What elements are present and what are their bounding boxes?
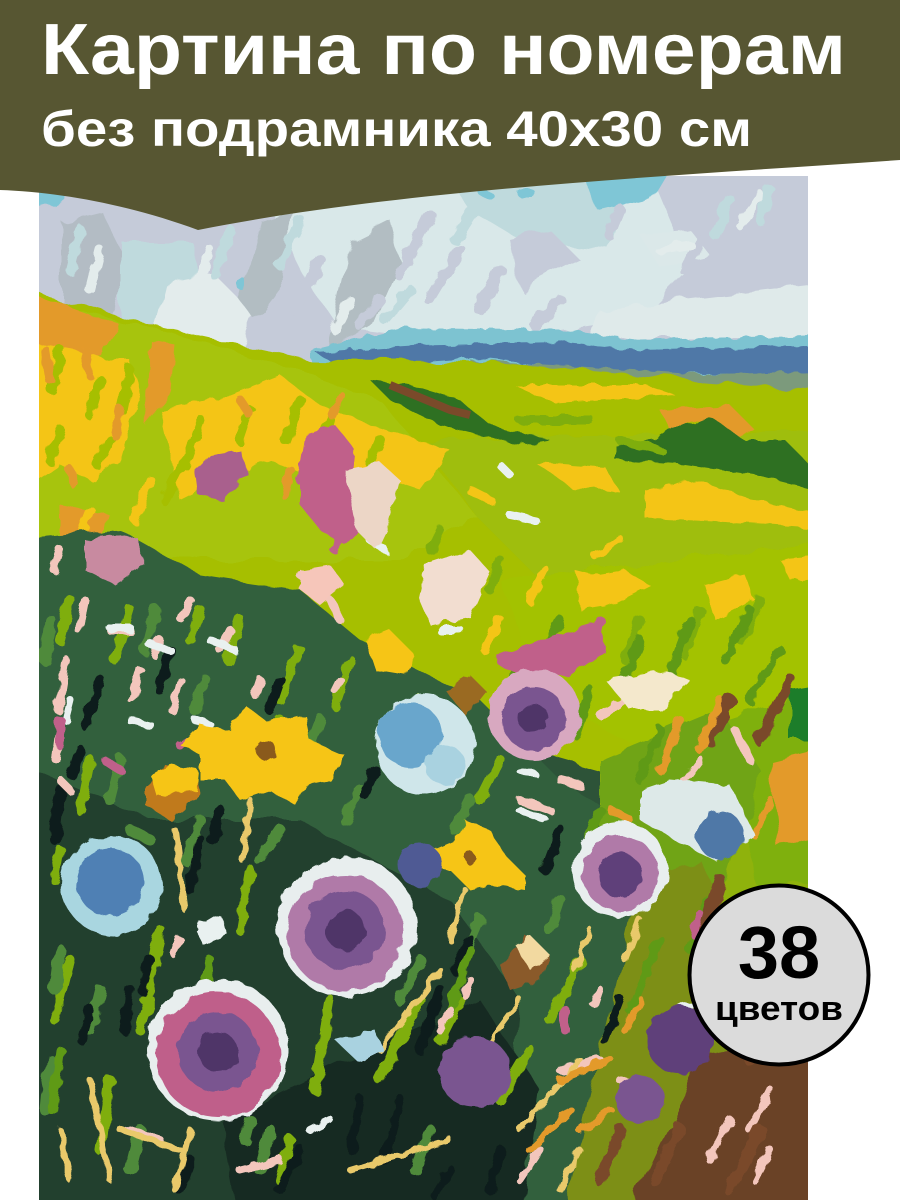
flower: purple allium centre: [277, 857, 417, 997]
brush strokes: [45, 440, 790, 1195]
flower buds: [145, 630, 550, 1062]
meadow base: [39, 292, 808, 772]
painting: meadow landscape: [39, 176, 808, 1200]
badge: colour count: [690, 886, 868, 1064]
flower: blue left: [62, 835, 162, 935]
field strokes: [45, 350, 760, 670]
sky: [39, 176, 808, 362]
flower: purple allium upper: [489, 669, 581, 761]
yellow flower fields: [39, 344, 808, 620]
dark foreground: [10, 530, 850, 1200]
sky streaks: [70, 190, 770, 330]
badge: colour count: цветов: [715, 990, 843, 1028]
badge: colour count: 38: [738, 911, 820, 994]
flowers: small purple: [398, 843, 714, 1124]
header banner: [0, 0, 900, 230]
pink flower clusters: [85, 425, 755, 860]
title: Картина по номерам: [41, 10, 846, 90]
flower: purple allium right: [572, 822, 668, 918]
subtitle: без подрамника 40х30 см: [41, 101, 752, 157]
flower: yellow centre: [420, 820, 525, 890]
flower: yellow large: [180, 705, 345, 805]
flower: purple allium lower left: [147, 979, 289, 1121]
distant hills: [310, 328, 850, 392]
flower: blue: [375, 695, 744, 859]
